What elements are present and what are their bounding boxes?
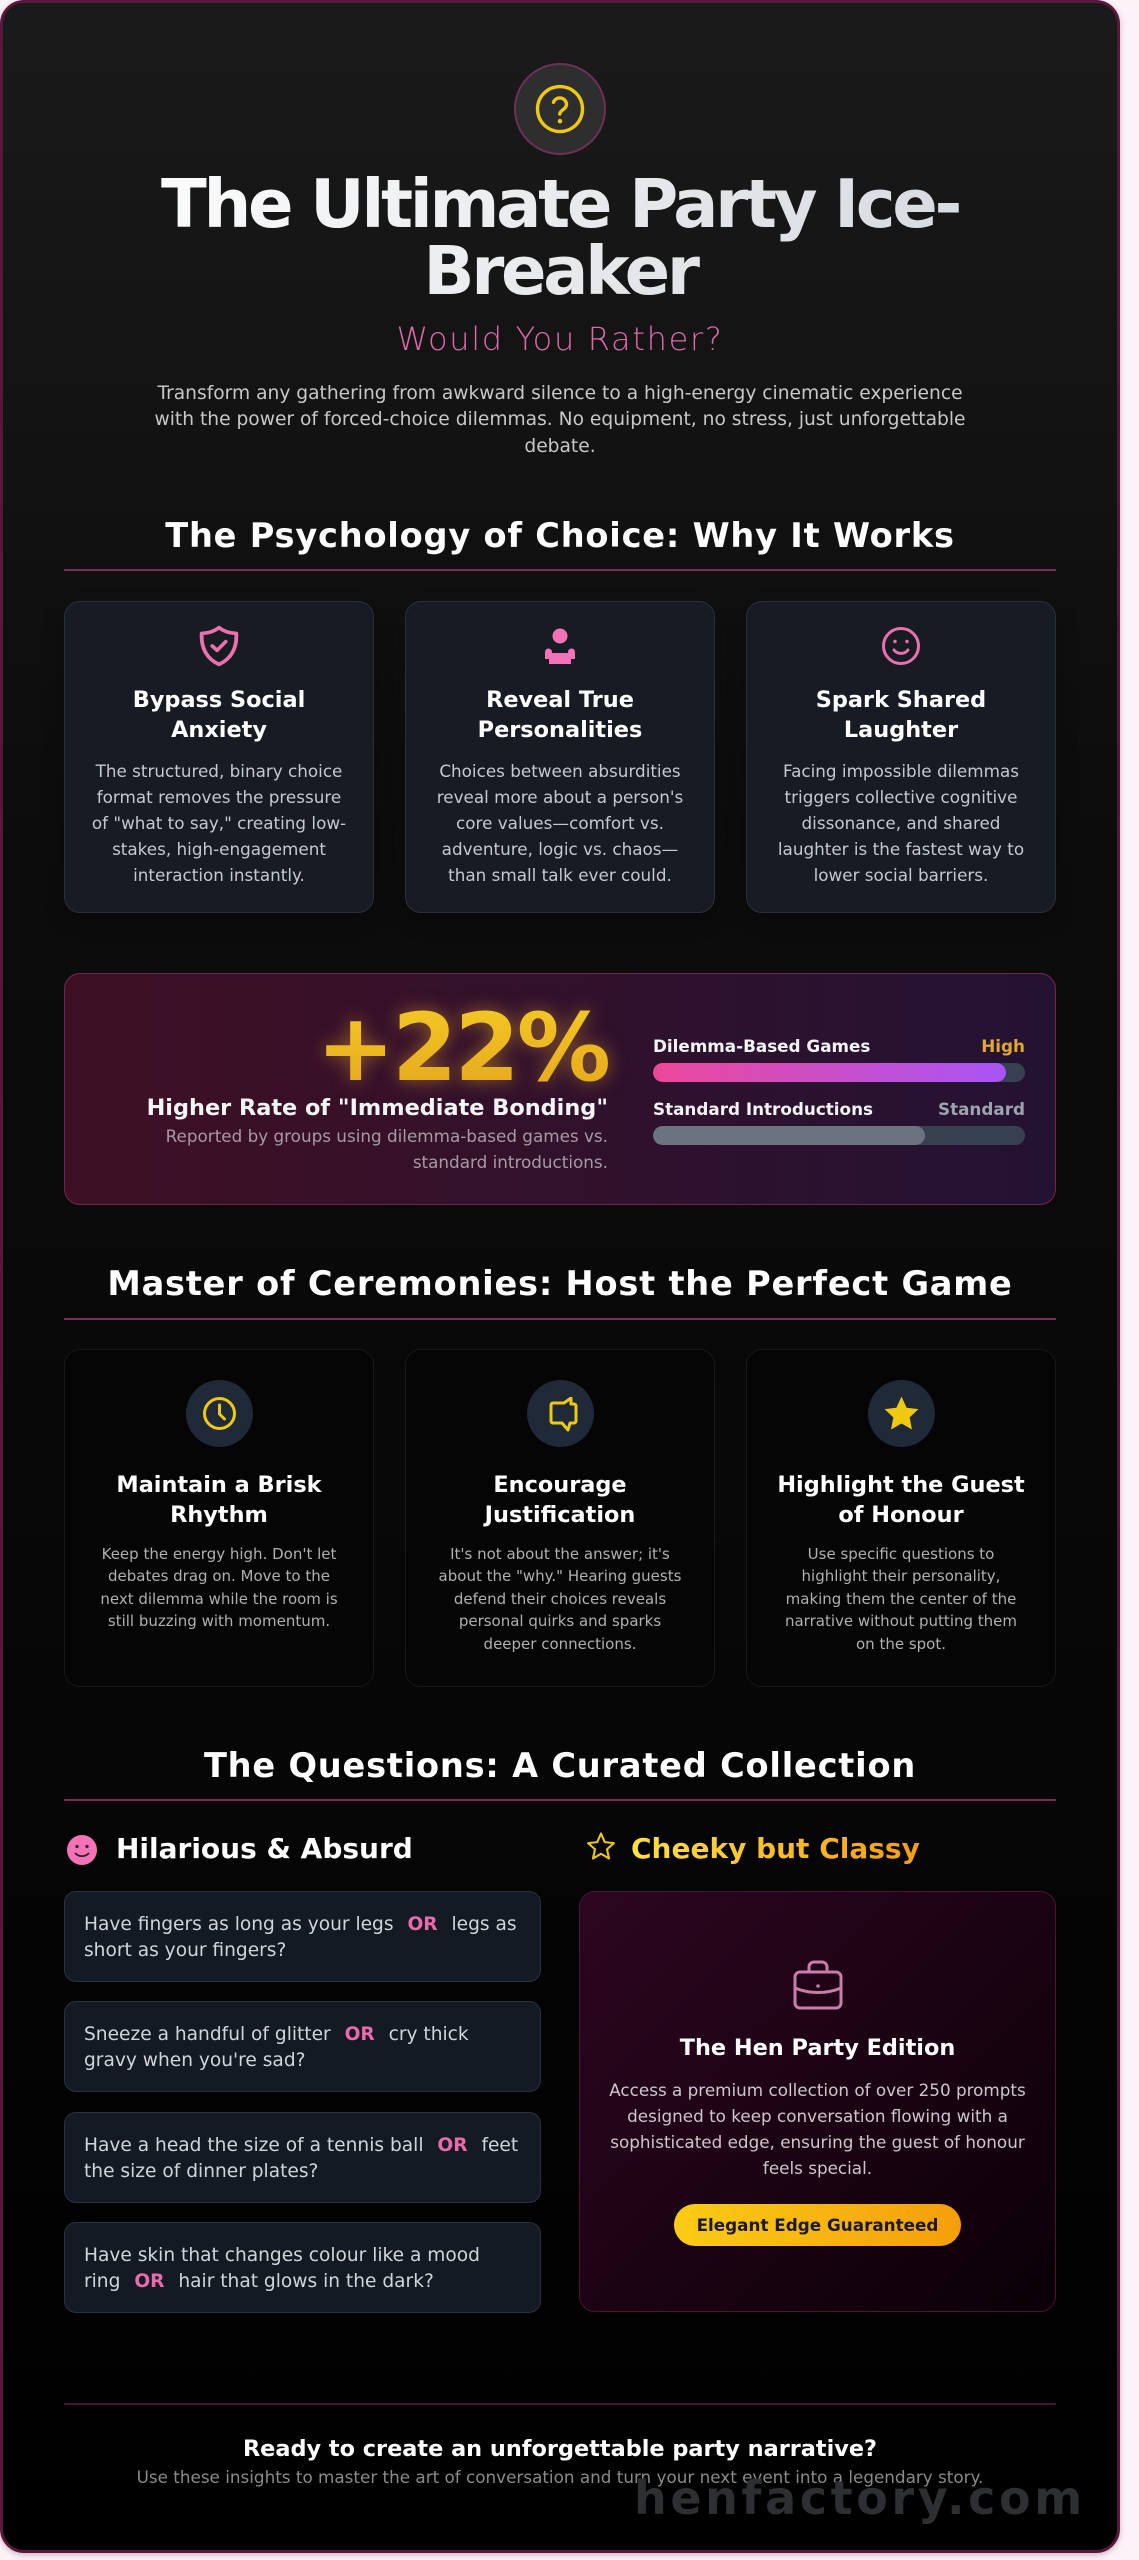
card text: guest: Use specific questions to — [808, 1545, 994, 1563]
card text: spark: Facing impossible dilemmas — [783, 761, 1019, 781]
card text: justification: deeper connections. — [484, 1635, 636, 1653]
card text: spark: laughter is the fastest way to — [778, 839, 1024, 859]
card title: Reveal True Personalities: Reveal True — [486, 687, 634, 713]
panel: bypass social anxiety — [64, 601, 374, 913]
hen party text: Access a premium collection of over 250 prompts — [609, 2080, 1026, 2100]
icon: smiley outline — [882, 627, 920, 665]
icon: filled smiley — [67, 1835, 97, 1865]
question card 2: gravy when you're sad? — [84, 2050, 306, 2071]
bar value: high: High — [981, 1036, 1025, 1056]
hen party text: feels special. — [763, 2158, 872, 2178]
bar: dilemma games 95% — [653, 1063, 1025, 1082]
icon: briefcase — [794, 1960, 842, 2010]
panel: guest of honour — [746, 1349, 1056, 1687]
question card 3 — [64, 2112, 541, 2203]
panel: brisk rhythm — [64, 1349, 374, 1687]
hen party title: The Hen Party Edition — [680, 2035, 955, 2061]
question card 2: Sneeze a handful of glitter OR cry thick — [84, 2024, 469, 2045]
question card 1: short as your fingers? — [84, 1940, 286, 1961]
question card 3: the size of dinner plates? — [84, 2161, 318, 2182]
hen party text: sophisticated edge, ensuring the guest of honour — [610, 2132, 1025, 2152]
card text: bypass: interaction instantly. — [133, 865, 305, 885]
card text: justification: It's not about the answer; it's — [450, 1545, 670, 1563]
intro text — [154, 383, 966, 457]
stat description: Reported by groups using dilemma-based games vs. — [166, 1126, 608, 1146]
panel: hen party edition — [579, 1891, 1056, 2312]
card text: reveal: adventure, logic vs. chaos— — [442, 839, 678, 859]
icon: filled star — [868, 1380, 935, 1447]
card title: Spark Shared Laughter — [816, 687, 986, 743]
panel: reveal true personalities — [405, 601, 715, 913]
question card 4 — [64, 2222, 541, 2313]
card text: reveal: Choices between absurdities — [439, 761, 681, 781]
intro text: debate. — [524, 436, 596, 457]
intro text: with the power of forced-choice dilemmas. No equipment, no stress, just unforgettable — [154, 409, 966, 430]
card text: bypass: stakes, high-engagement — [112, 839, 326, 859]
card text: bypass: of "what to say," creating low- — [92, 813, 346, 833]
card text: brisk: still buzzing with momentum. — [108, 1612, 330, 1630]
card text: spark: dissonance, and shared — [802, 813, 1000, 833]
icon: clock — [186, 1380, 253, 1447]
stat: +22%: +22% — [316, 994, 608, 1103]
heading: master of ceremonies: Master of Ceremonies: Host the Perfect Game — [107, 1264, 1013, 1303]
title: The Ultimate Party Ice- — [161, 165, 959, 243]
bar label: standard intro: Standard Introductions — [653, 1099, 873, 1119]
panel: stat banner — [64, 973, 1056, 1205]
card text: brisk: debates drag on. Move to the — [108, 1567, 330, 1585]
question card 3: Have a head the size of a tennis ball OR feet — [84, 2135, 518, 2156]
hen party text: designed to keep conversation flowing with a — [627, 2106, 1008, 2126]
icon: chat bubble — [527, 1380, 594, 1447]
card text: guest: highlight their personality, — [802, 1567, 1000, 1585]
card title: justification — [483, 1472, 635, 1528]
card text: justification: defend their choices reveals — [454, 1590, 666, 1608]
bar label: dilemma games: Dilemma-Based Games — [653, 1036, 870, 1056]
card title: guest of honour: Highlight the Guest — [777, 1472, 1025, 1498]
title — [64, 171, 1056, 305]
intro text: Transform any gathering from awkward silence to a high-energy cinematic experience — [157, 383, 963, 404]
card title: Bypass Social Anxiety: Anxiety — [171, 717, 267, 743]
stat: +22% — [108, 993, 608, 1105]
card text: spark — [778, 761, 1024, 885]
stat description — [166, 1126, 608, 1172]
question card 2 — [64, 2001, 541, 2092]
watermark: henfactory.com — [634, 2471, 1086, 2525]
card text: guest: on the spot. — [856, 1635, 946, 1653]
bar: standard intro 73% — [653, 1126, 1025, 1145]
card text: reveal: reveal more about a person's — [437, 787, 683, 807]
card text: justification: about the "why." Hearing guests — [439, 1567, 681, 1585]
card text: brisk — [100, 1545, 338, 1630]
card text: spark: lower social barriers. — [814, 865, 988, 885]
question card 1: Have fingers as long as your legs OR legs as — [84, 1914, 517, 1935]
card title: Bypass Social Anxiety — [133, 687, 305, 743]
card text: guest: making them the center of the — [786, 1590, 1016, 1608]
footer text: Use these insights to master the art of conversation and turn your next event into a legendary story. — [137, 2467, 983, 2487]
icon: star outline — [587, 1832, 615, 1860]
card title: brisk rhythm — [116, 1472, 322, 1528]
question card 4: ring OR hair that glows in the dark? — [84, 2271, 434, 2292]
card text: reveal — [437, 761, 683, 885]
card text: guest — [785, 1545, 1017, 1653]
icon: question mark badge — [514, 63, 606, 155]
card text: bypass — [92, 761, 346, 885]
card title: Reveal True Personalities: Personalities — [478, 717, 642, 743]
card title: Bypass Social Anxiety: Bypass Social — [133, 687, 305, 713]
card title: brisk rhythm: Rhythm — [170, 1502, 268, 1528]
panel: justification — [405, 1349, 715, 1687]
card title: brisk rhythm: Maintain a Brisk — [116, 1472, 322, 1498]
card title: justification: Encourage — [493, 1472, 627, 1498]
question card 4: Have skin that changes colour like a mood — [84, 2245, 480, 2266]
card title: justification: Justification — [485, 1502, 635, 1528]
subheading: hilarious: Hilarious & Absurd — [116, 1832, 413, 1865]
question card 1 — [64, 1891, 541, 1982]
panel: spark shared laughter — [746, 601, 1056, 913]
bar value: standard: Standard — [938, 1099, 1025, 1119]
card title: guest of honour: of Honour — [838, 1502, 964, 1528]
stat description: standard introductions. — [413, 1152, 608, 1172]
icon: person — [545, 628, 575, 664]
card text: spark: triggers collective cognitive — [785, 787, 1017, 807]
card text: bypass: format removes the pressure — [97, 787, 341, 807]
card text: guest: narrative without putting them — [785, 1612, 1017, 1630]
heading: the questions: The Questions: A Curated Collection — [204, 1746, 916, 1785]
card title: Spark Shared Laughter: Laughter — [844, 717, 958, 743]
card title: Spark Shared Laughter: Spark Shared — [816, 687, 986, 713]
stat label: Higher Rate of "Immediate Bonding" — [147, 1095, 608, 1121]
card title: guest of honour — [777, 1472, 1025, 1528]
subtitle: Would You Rather? — [396, 320, 724, 358]
hen party text — [609, 2080, 1026, 2178]
card text: justification: personal quirks and sparks — [459, 1612, 661, 1630]
icon: shield check — [200, 626, 238, 666]
card text: reveal: than small talk ever could. — [448, 865, 672, 885]
card title: Reveal True Personalities — [478, 687, 642, 743]
heading: psychology of choice: The Psychology of Choice: Why It Works — [165, 516, 955, 555]
card text: justification — [439, 1545, 681, 1653]
footer heading: Ready to create an unforgettable party narrative? — [243, 2436, 877, 2462]
card text: reveal: core values—comfort vs. — [456, 813, 664, 833]
card text: brisk: next dilemma while the room is — [100, 1590, 338, 1608]
card text: bypass: The structured, binary choice — [96, 761, 342, 781]
title: Breaker — [423, 232, 697, 310]
badge: elegant edge guaranteed: Elegant Edge Guaranteed — [697, 2215, 938, 2235]
card text: brisk: Keep the energy high. Don't let — [102, 1545, 336, 1563]
badge: elegant edge guaranteed — [674, 2204, 961, 2246]
subheading: cheeky: Cheeky but Classy — [631, 1832, 920, 1865]
